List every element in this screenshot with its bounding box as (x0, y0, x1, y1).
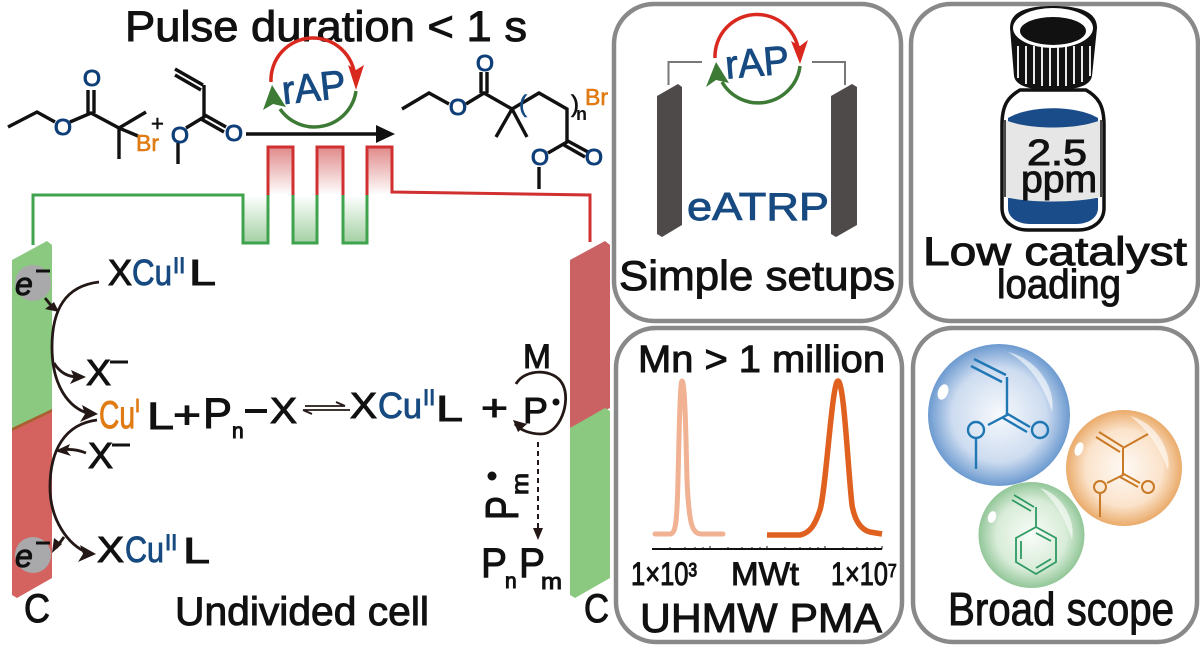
rAP cycle small: rAP (723, 38, 791, 88)
panel: simple setups (614, 4, 901, 321)
XCuIIL top: X (108, 252, 132, 293)
central equilibrium equation: L (436, 388, 463, 429)
product polymer molecule: O (449, 94, 467, 120)
panel caption: loading (997, 261, 1121, 307)
monomer molecule: methyl acrylate (171, 69, 243, 164)
central equilibrium equation: Cu (99, 394, 135, 437)
initiator molecule: Br (136, 130, 159, 156)
PnPm dimer: P (481, 539, 507, 586)
initiator molecule: + (151, 111, 164, 136)
central equilibrium equation: II (423, 385, 435, 410)
vial label: 2.5 ppm: ppm (1021, 159, 1097, 201)
propagating radical with monomer cycle (513, 338, 566, 434)
monomer molecule: methyl acrylate: O (171, 122, 189, 148)
PnPm dimer: n (505, 570, 517, 593)
rAP cycle: rAP (280, 63, 348, 113)
title: pulse duration: Pulse duration < 1 s (125, 3, 527, 51)
rotated radical Pm: m (507, 473, 533, 495)
product polymer molecule: O (476, 50, 494, 76)
vial icon (1002, 6, 1104, 230)
central equilibrium equation: X (270, 390, 297, 431)
blue sphere: acrylate (928, 344, 1070, 486)
heading: Mn > 1 million: Mn > 1 million (638, 339, 885, 381)
XCuIIL bottom: X (97, 529, 124, 570)
panel: low catalyst loading (911, 4, 1198, 321)
dark GPC peak (767, 381, 882, 535)
product polymer molecule: Br (585, 84, 608, 110)
XCuIIL top: L (189, 252, 216, 293)
XCuIIL top (108, 252, 216, 293)
central equilibrium equation: Cu (378, 385, 422, 426)
central equilibrium equation: I (135, 396, 140, 416)
central equilibrium equation: + (173, 395, 201, 437)
product polymer molecule: O (531, 144, 549, 170)
axis labels: MWt (731, 556, 799, 592)
axis labels (631, 556, 897, 592)
left electrode (12, 241, 52, 598)
product polymer molecule (402, 50, 608, 189)
panel caption: Low catalyst (923, 230, 1187, 274)
wires (668, 62, 845, 85)
product polymer molecule: O (585, 144, 603, 170)
central equilibrium equation (99, 385, 508, 443)
X- top: X (86, 352, 111, 393)
right plate electrode (831, 84, 857, 237)
panel caption: UHMW PMA (640, 595, 883, 641)
rAP cycle small (706, 14, 808, 103)
right electrode (570, 241, 610, 598)
panel caption (923, 230, 1187, 307)
catalytic curved arrows (45, 282, 99, 562)
product polymer molecule: ( (519, 91, 527, 118)
electrode label left: C (24, 587, 50, 631)
PnPm dimer (481, 539, 562, 594)
panel: broad scope (913, 328, 1197, 642)
XCuIIL bottom: L (183, 530, 210, 571)
electron circle top (15, 265, 51, 302)
rAP cycle (263, 38, 364, 127)
XCuIIL bottom (97, 529, 210, 571)
XCuIIL top: Cu (132, 252, 172, 293)
initiator molecule: O (54, 114, 72, 140)
left plate electrode (657, 84, 682, 237)
panel: UHMW PMA (616, 328, 902, 642)
product polymer molecule: ) (571, 91, 579, 118)
reaction arrow (246, 125, 395, 143)
monomer molecule: methyl acrylate: O (225, 120, 243, 146)
light GPC peak (655, 381, 723, 534)
panel caption: Broad scope (948, 583, 1174, 635)
vial label: 2.5 ppm: 2.5 (1027, 132, 1087, 173)
PnPm dimer: P (519, 539, 545, 586)
PnPm dimer: m (541, 569, 562, 594)
propagating radical with monomer cycle: P (523, 390, 548, 431)
axis labels: 1×10⁷ (831, 556, 897, 592)
central equilibrium equation: X (350, 385, 377, 426)
central equilibrium equation: P (203, 390, 232, 438)
electron circle bottom: e (15, 538, 33, 574)
dashed termination arrow (533, 442, 543, 540)
product polymer molecule: n (576, 104, 587, 124)
electrode label right: C (584, 587, 609, 631)
XCuIIL top: II (173, 253, 185, 278)
central equilibrium equation: n (232, 420, 244, 443)
X- bottom: X (88, 435, 113, 476)
vial label: 2.5 ppm (1021, 132, 1097, 201)
molecular weight axis (652, 546, 882, 549)
initiator molecule (8, 65, 164, 159)
panel caption: Simple setups (619, 252, 895, 299)
rotated radical Pm (476, 472, 533, 520)
caption: undivided cell: Undivided cell (175, 590, 429, 634)
electron circle bottom (15, 537, 51, 574)
X- bottom (88, 435, 130, 476)
central equilibrium equation: L (147, 396, 174, 438)
XCuIIL bottom: II (165, 530, 177, 555)
X- top (86, 352, 128, 393)
rotated radical Pm: P (476, 496, 528, 520)
XCuIIL bottom: Cu (125, 529, 164, 570)
propagating radical with monomer cycle: M (523, 338, 551, 376)
pulse waveform (33, 147, 590, 245)
green sphere: styrene (978, 482, 1084, 588)
axis labels: 1×10³ (631, 556, 697, 592)
orange sphere: methacrylate (1066, 410, 1182, 526)
central equilibrium equation: + (481, 387, 508, 428)
eATRP label: eATRP (687, 186, 829, 229)
initiator molecule: O (83, 65, 101, 91)
electron circle top: e (15, 266, 33, 302)
